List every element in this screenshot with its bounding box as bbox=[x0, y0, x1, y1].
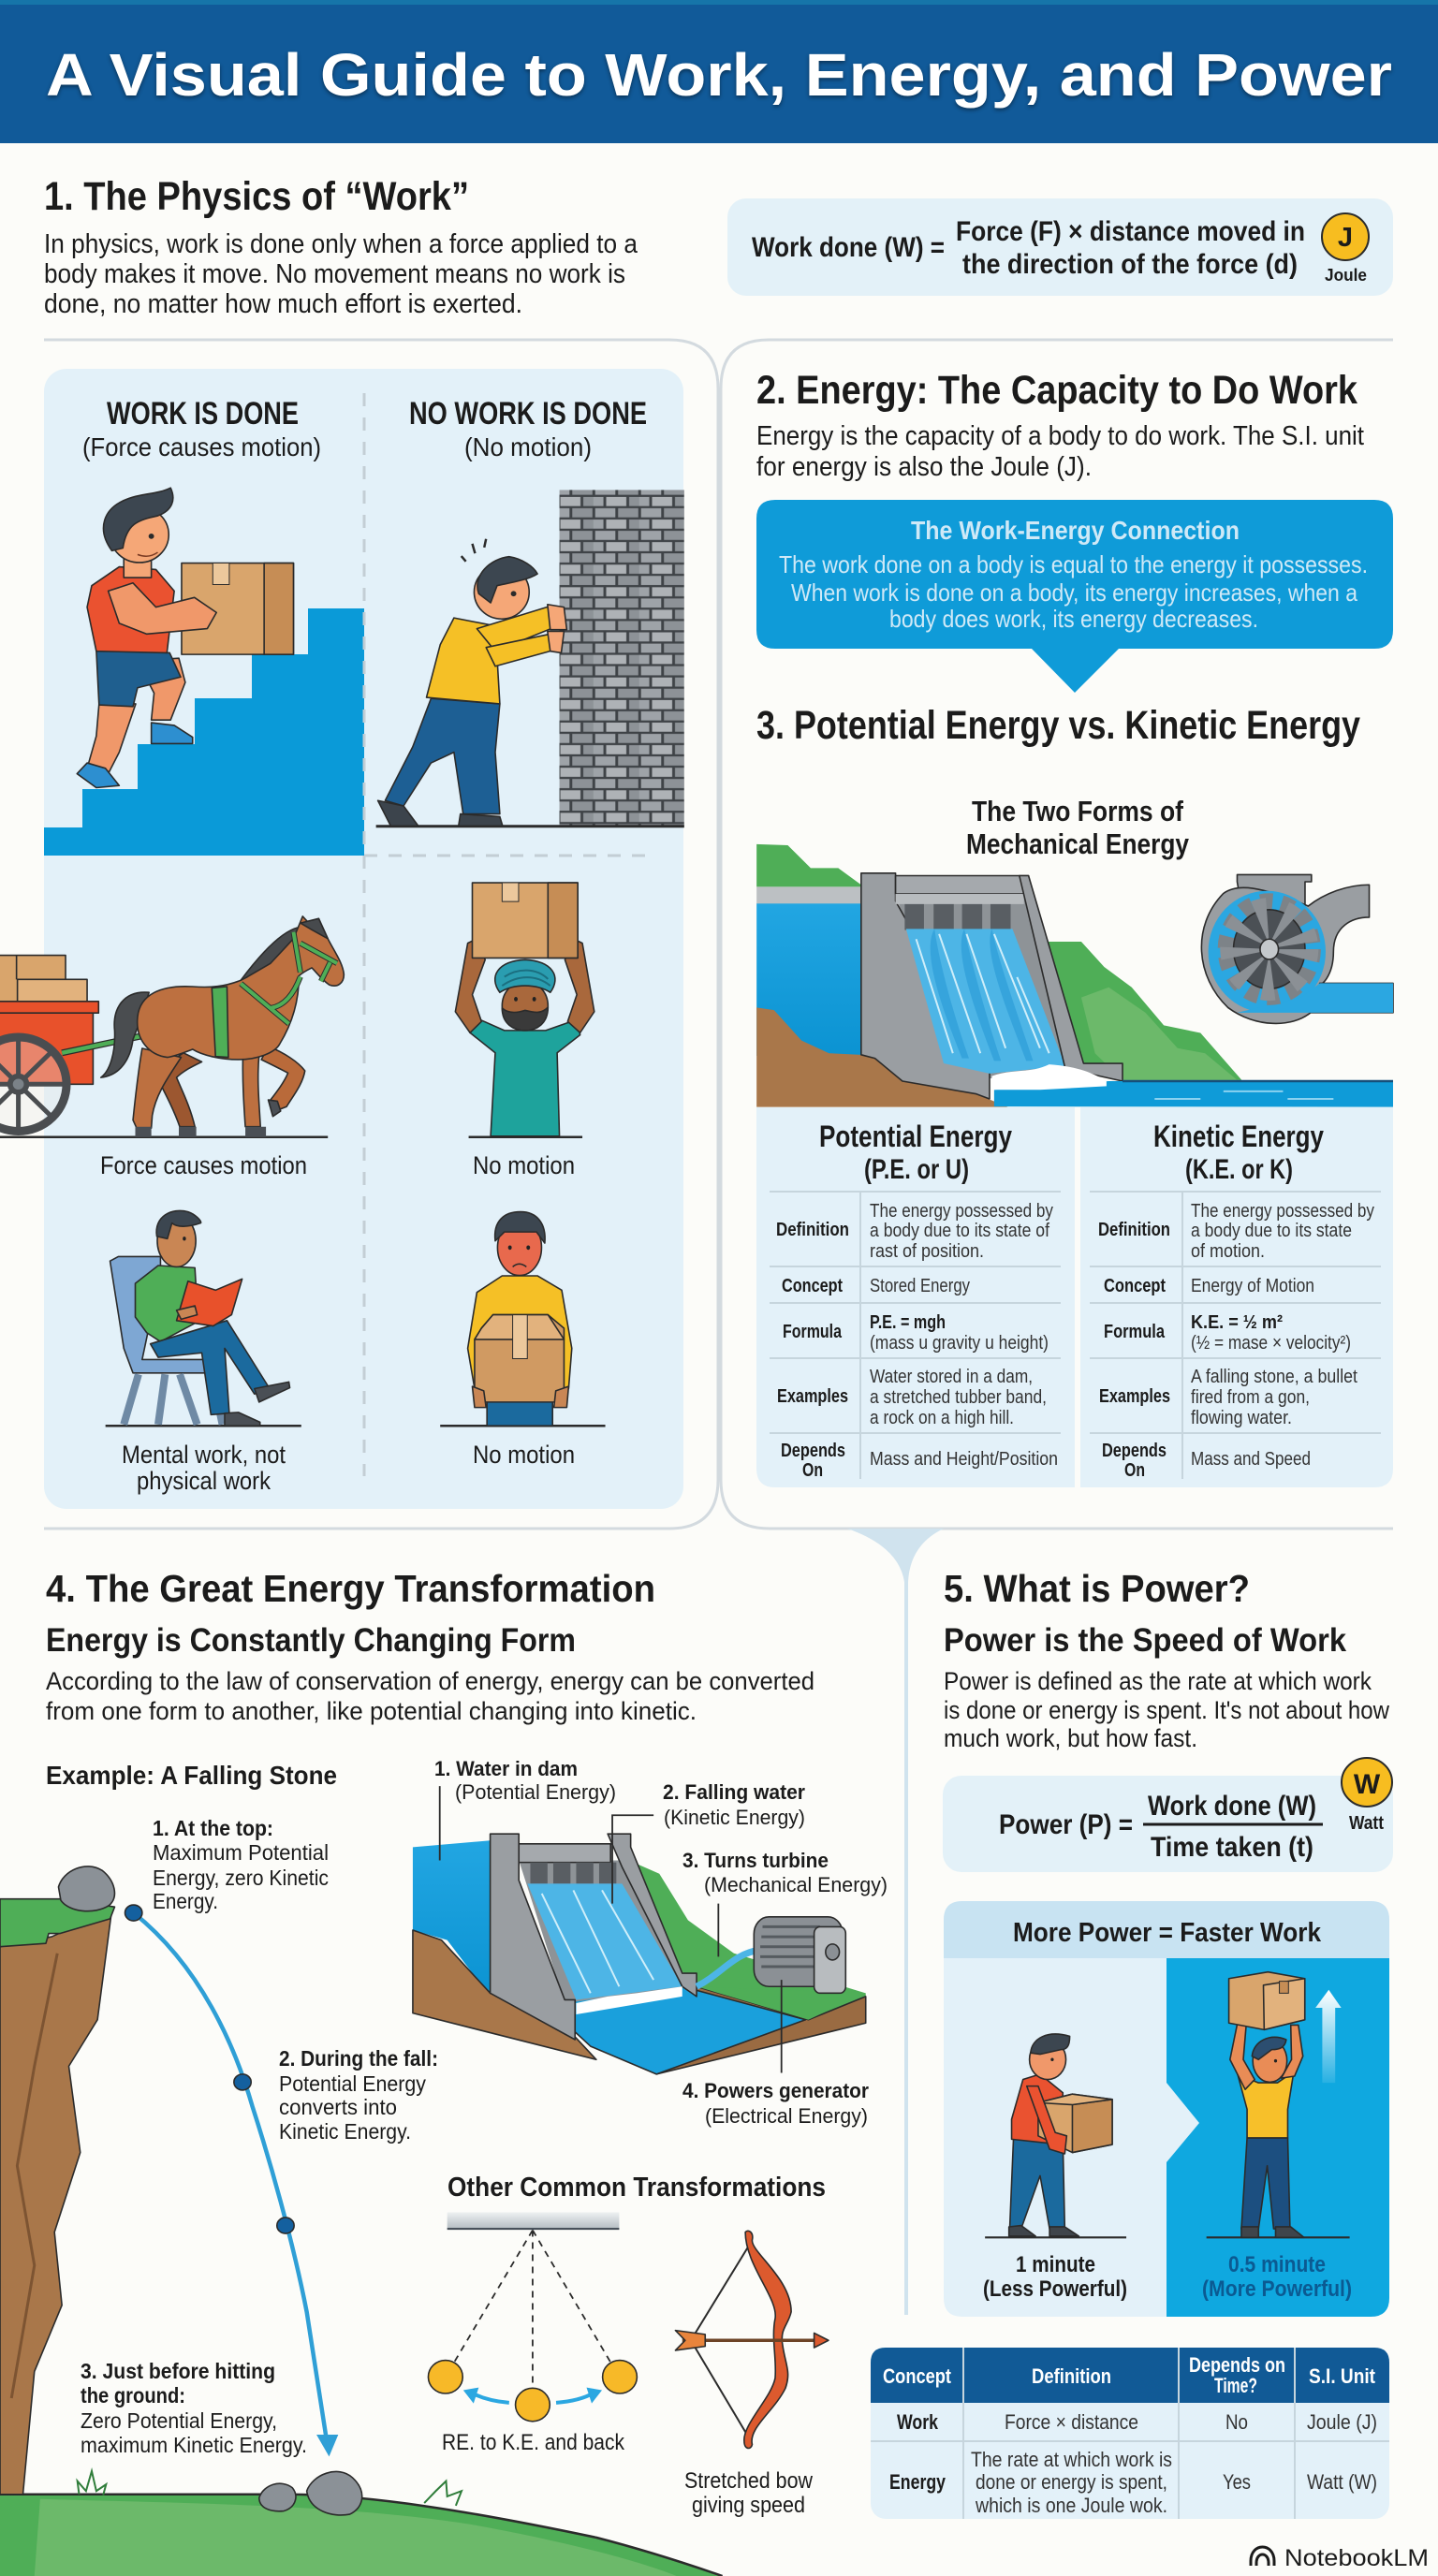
panel: kinetic energy table: K.E. = ½ m² bbox=[1191, 1312, 1283, 1333]
label: at the top: Energy, zero Kinetic bbox=[153, 1866, 329, 1890]
icon: man holding box on head bbox=[455, 883, 594, 1137]
panel: potential energy table: Potential Energy bbox=[819, 1120, 1012, 1153]
label: before hitting the ground: the ground: bbox=[81, 2383, 185, 2408]
panel: kinetic energy table: Kinetic Energy bbox=[1153, 1120, 1324, 1153]
label: no motion: No motion bbox=[473, 1151, 575, 1179]
panel: potential energy table bbox=[756, 1107, 1075, 1487]
panel: kinetic energy table: Definition bbox=[1098, 1220, 1170, 1240]
panel: kinetic energy table: Depends bbox=[1102, 1441, 1167, 1461]
power formula box: Work done (W) bbox=[1148, 1791, 1316, 1822]
section 5 heading bbox=[944, 1567, 1346, 1659]
label: half minute: (More Powerful) bbox=[1202, 2276, 1352, 2302]
section 5 heading: Power is the Speed of Work bbox=[944, 1622, 1346, 1659]
label: before hitting the ground: Zero Potential Energy, bbox=[81, 2408, 277, 2433]
panel: more power equals faster work: More Power = Faster Work bbox=[1013, 1918, 1322, 1948]
table row: work: Work bbox=[897, 2410, 939, 2434]
label: bow: Stretched bow bbox=[684, 2468, 814, 2494]
label: at the top: Energy. bbox=[153, 1889, 218, 1913]
table header: Time? bbox=[1214, 2374, 1257, 2397]
dam label: water in dam bbox=[434, 1757, 616, 1804]
panel: kinetic energy table: Mass and Speed bbox=[1191, 1449, 1311, 1470]
table row: energy: Yes bbox=[1223, 2470, 1251, 2494]
subheading: falling stone: Example: A Falling Stone bbox=[46, 1761, 337, 1790]
panel: potential energy table: Formula bbox=[783, 1322, 843, 1342]
callout: work-energy connection: The Work-Energy Connection bbox=[911, 516, 1240, 545]
callout: work-energy connection: The work done on a body is equal to the energy it possesses. bbox=[779, 550, 1368, 578]
section 4 text: from one form to another, like potential changing into kinetic. bbox=[46, 1697, 697, 1725]
panel: potential energy table: The energy possessed by bbox=[870, 1201, 1053, 1222]
icon: bow and arrow bbox=[675, 2231, 829, 2448]
icon: horse pulling cart bbox=[0, 916, 344, 1137]
panel: kinetic energy table: fired from a gon, bbox=[1191, 1387, 1310, 1408]
label: at the top: Maximum Potential bbox=[153, 1840, 329, 1865]
label: force causes motion: Force causes motion bbox=[100, 1151, 307, 1179]
icon: watt badge: W bbox=[1354, 1769, 1381, 1800]
panel: potential energy table: Depends bbox=[781, 1441, 845, 1461]
panel: kinetic energy table bbox=[1080, 1107, 1393, 1487]
heading: no work is done bbox=[409, 396, 647, 461]
panel: kinetic energy table: Energy of Motion bbox=[1191, 1276, 1314, 1296]
panel: potential energy table: (P.E. or U) bbox=[864, 1154, 969, 1185]
panel: kinetic energy table: (½ = mase × velocity²) bbox=[1191, 1333, 1351, 1354]
panel: potential energy table: Definition bbox=[776, 1220, 849, 1240]
section 4 heading: 4. The Great Energy Transformation bbox=[46, 1567, 655, 1610]
stairs bbox=[44, 608, 364, 856]
panel: potential energy table: a rock on a high hill. bbox=[870, 1408, 1014, 1428]
label: during the fall: 2. During the fall: bbox=[279, 2046, 438, 2071]
power formula box bbox=[943, 1758, 1393, 1872]
callout: work-energy connection: When work is done on a body, its energy increases, when a bbox=[791, 578, 1357, 607]
panel: work vs no work bbox=[0, 369, 684, 1509]
table row: work: Joule (J) bbox=[1307, 2410, 1377, 2434]
panel: potential energy table: Examples bbox=[777, 1386, 848, 1407]
label: mental work: Mental work, not bbox=[122, 1441, 286, 1469]
panel outlines bbox=[44, 340, 1393, 1529]
dam label: falling water bbox=[663, 1780, 805, 1829]
heading: no work is done: NO WORK IS DONE bbox=[409, 396, 647, 432]
section 1 intro text: body makes it move. No movement means no work is bbox=[44, 259, 625, 289]
icon: pendulum bbox=[428, 2212, 637, 2422]
icon: watt badge bbox=[1342, 1758, 1392, 1834]
label: pendulum: RE. to K.E. and back bbox=[442, 2430, 625, 2455]
panel: potential energy table: Mass and Height/Position bbox=[870, 1449, 1058, 1470]
section 1 intro text bbox=[44, 229, 638, 319]
table header: Definition bbox=[1032, 2364, 1111, 2388]
section 5 heading: 5. What is Power? bbox=[944, 1567, 1250, 1610]
panel: potential energy table: P.E. = mgh bbox=[870, 1312, 946, 1333]
panel: kinetic energy table: a body due to its state bbox=[1191, 1221, 1352, 1241]
panel: kinetic energy table: Concept bbox=[1104, 1276, 1166, 1296]
section 4 heading: Energy is Constantly Changing Form bbox=[46, 1622, 576, 1659]
table row: work bbox=[897, 2410, 1377, 2434]
section 1 intro text: done, no matter how much effort is exerted. bbox=[44, 289, 522, 319]
work formula box bbox=[727, 198, 1393, 296]
label: mental work: physical work bbox=[137, 1467, 271, 1495]
panel: potential energy table: Water stored in a dam, bbox=[870, 1367, 1033, 1387]
heading: work is done: (Force causes motion) bbox=[82, 432, 321, 461]
table header: Concept bbox=[883, 2364, 952, 2388]
section 2 heading: 2. Energy: The Capacity to Do Work bbox=[756, 368, 1357, 413]
section 5 text: is done or energy is spent. It's not about how bbox=[944, 1696, 1389, 1724]
table: work vs energy summary bbox=[871, 2348, 1389, 2519]
label: no motion: No motion bbox=[473, 1441, 575, 1469]
mechanical energy subheading bbox=[966, 795, 1190, 860]
icon: joule badge bbox=[1322, 213, 1369, 285]
mechanical energy subheading: The Two Forms of bbox=[972, 795, 1184, 827]
subheading: other transformations: Other Common Transformations bbox=[448, 2173, 826, 2203]
table row: work: Force × distance bbox=[1005, 2410, 1138, 2434]
section 4 heading bbox=[46, 1567, 655, 1659]
panel: potential energy table: a body due to its state of bbox=[870, 1221, 1049, 1241]
icon: man pushing brick wall bbox=[376, 490, 684, 827]
table header bbox=[883, 2353, 1376, 2397]
panel: potential energy table: rast of position. bbox=[870, 1241, 984, 1262]
illustration: falling stone cliff bbox=[0, 1866, 723, 2576]
icon: man standing holding box bbox=[440, 1212, 606, 1426]
power formula box: Time taken (t) bbox=[1151, 1832, 1313, 1863]
label: at the top bbox=[153, 1816, 329, 1913]
label: one minute bbox=[983, 2252, 1127, 2302]
work formula box: the direction of the force (d) bbox=[962, 249, 1298, 280]
icon: person lifting box overhead bbox=[1207, 1972, 1350, 2237]
label: mental work bbox=[122, 1441, 286, 1495]
panel: potential energy table: Concept bbox=[782, 1276, 843, 1296]
table row: energy: which is one Joule wok. bbox=[975, 2494, 1167, 2517]
illustration: dam and turbine bbox=[756, 844, 1393, 1107]
label: during the fall: Potential Energy bbox=[279, 2071, 426, 2096]
section 1 heading: 1. The Physics of “Work” bbox=[44, 174, 469, 219]
label: at the top: 1. At the top: bbox=[153, 1816, 273, 1840]
label: during the fall: converts into bbox=[279, 2095, 397, 2119]
dam label: turns turbine: 3. Turns turbine bbox=[682, 1849, 829, 1872]
table row: work: No bbox=[1225, 2410, 1248, 2434]
label: during the fall: Kinetic Energy. bbox=[279, 2119, 411, 2144]
heading: work is done: WORK IS DONE bbox=[107, 396, 299, 432]
label: bow: giving speed bbox=[692, 2493, 805, 2518]
label: half minute: 0.5 minute bbox=[1228, 2252, 1326, 2277]
section connector notch bbox=[847, 1529, 944, 2315]
icon: joule badge: Joule bbox=[1325, 266, 1367, 285]
table row: energy: Energy bbox=[889, 2470, 946, 2494]
icon: man climbing stairs with box bbox=[77, 488, 293, 787]
dam label: turns turbine: (Mechanical Energy) bbox=[704, 1873, 888, 1896]
panel: kinetic energy table: The energy possessed by bbox=[1191, 1201, 1374, 1222]
label: one minute: 1 minute bbox=[1016, 2252, 1095, 2277]
section 5 text bbox=[944, 1667, 1389, 1752]
icon: person carrying box slowly bbox=[985, 2034, 1126, 2237]
section 2 text: for energy is also the Joule (J). bbox=[756, 452, 1092, 482]
panel: potential energy table: On bbox=[802, 1460, 823, 1481]
label: bow bbox=[684, 2468, 814, 2518]
table header: Depends on bbox=[1189, 2353, 1285, 2377]
panel: potential energy table: Stored Energy bbox=[870, 1276, 970, 1296]
panel: kinetic energy table: flowing water. bbox=[1191, 1408, 1292, 1428]
heading: work is done bbox=[82, 396, 321, 461]
dam label: powers generator: (Electrical Energy) bbox=[705, 2104, 868, 2128]
illustration: dam with generator bbox=[413, 1786, 866, 2074]
label: half minute bbox=[1202, 2252, 1352, 2302]
label: before hitting the ground bbox=[81, 2359, 307, 2457]
icon: man reading in chair bbox=[106, 1210, 301, 1426]
table header: S.I. Unit bbox=[1309, 2364, 1376, 2388]
panel: more power equals faster work bbox=[944, 1901, 1389, 2317]
section 1 intro text: In physics, work is done only when a force applied to a bbox=[44, 229, 638, 259]
panel: kinetic energy table: of motion. bbox=[1191, 1241, 1265, 1262]
work formula box: Work done (W) = bbox=[752, 232, 945, 263]
header banner bbox=[0, 0, 1438, 143]
panel: kinetic energy table: Examples bbox=[1099, 1386, 1170, 1407]
power formula box: Power (P) = bbox=[999, 1809, 1133, 1840]
panel: kinetic energy table: A falling stone, a bullet bbox=[1191, 1367, 1357, 1387]
label: before hitting the ground: maximum Kinetic Energy. bbox=[81, 2433, 307, 2457]
NotebookLM logo: NotebookLM bbox=[1284, 2545, 1429, 2571]
callout: work-energy connection bbox=[756, 500, 1393, 693]
section 4 text: According to the law of conservation of energy, energy can be converted bbox=[46, 1667, 814, 1695]
panel: kinetic energy table: (K.E. or K) bbox=[1185, 1154, 1293, 1185]
icon: watt badge: Watt bbox=[1349, 1813, 1384, 1834]
dam label: water in dam: 1. Water in dam bbox=[434, 1757, 578, 1780]
table row: energy: Watt (W) bbox=[1307, 2470, 1377, 2494]
table row: energy: done or energy is spent, bbox=[976, 2470, 1167, 2494]
panel: kinetic energy table: On bbox=[1124, 1460, 1145, 1481]
table row: energy: The rate at which work is bbox=[971, 2448, 1172, 2471]
dam label: turns turbine bbox=[682, 1849, 888, 1896]
callout: work-energy connection: body does work, its energy decreases. bbox=[889, 605, 1258, 633]
dam label: powers generator bbox=[682, 2079, 869, 2128]
label: before hitting the ground: 3. Just before hitting bbox=[81, 2359, 275, 2383]
section 2 text bbox=[756, 421, 1364, 482]
dam label: powers generator: 4. Powers generator bbox=[682, 2079, 869, 2102]
dam label: falling water: 2. Falling water bbox=[663, 1780, 805, 1804]
section 2 text: Energy is the capacity of a body to do work. The S.I. unit bbox=[756, 421, 1364, 451]
section 5 text: much work, but how fast. bbox=[944, 1724, 1197, 1752]
mechanical energy subheading: Mechanical Energy bbox=[966, 827, 1190, 860]
section 5 text: Power is defined as the rate at which work bbox=[944, 1667, 1372, 1695]
label: during the fall bbox=[279, 2046, 438, 2144]
dam label: falling water: (Kinetic Energy) bbox=[664, 1806, 805, 1829]
title: A Visual Guide to Work, Energy, and Power bbox=[46, 41, 1392, 109]
table row: energy bbox=[889, 2448, 1377, 2517]
panel: kinetic energy table: Formula bbox=[1104, 1322, 1166, 1342]
label: one minute: (Less Powerful) bbox=[983, 2276, 1127, 2302]
heading: no work is done: (No motion) bbox=[464, 432, 592, 461]
panel: potential energy table: a stretched tubber band, bbox=[870, 1387, 1047, 1408]
panel: potential energy table: (mass u gravity u height) bbox=[870, 1333, 1049, 1354]
section 4 text bbox=[46, 1667, 814, 1725]
dam label: water in dam: (Potential Energy) bbox=[455, 1780, 616, 1804]
icon: joule badge: J bbox=[1338, 223, 1353, 253]
work formula box: Force (F) × distance moved in bbox=[956, 216, 1305, 247]
